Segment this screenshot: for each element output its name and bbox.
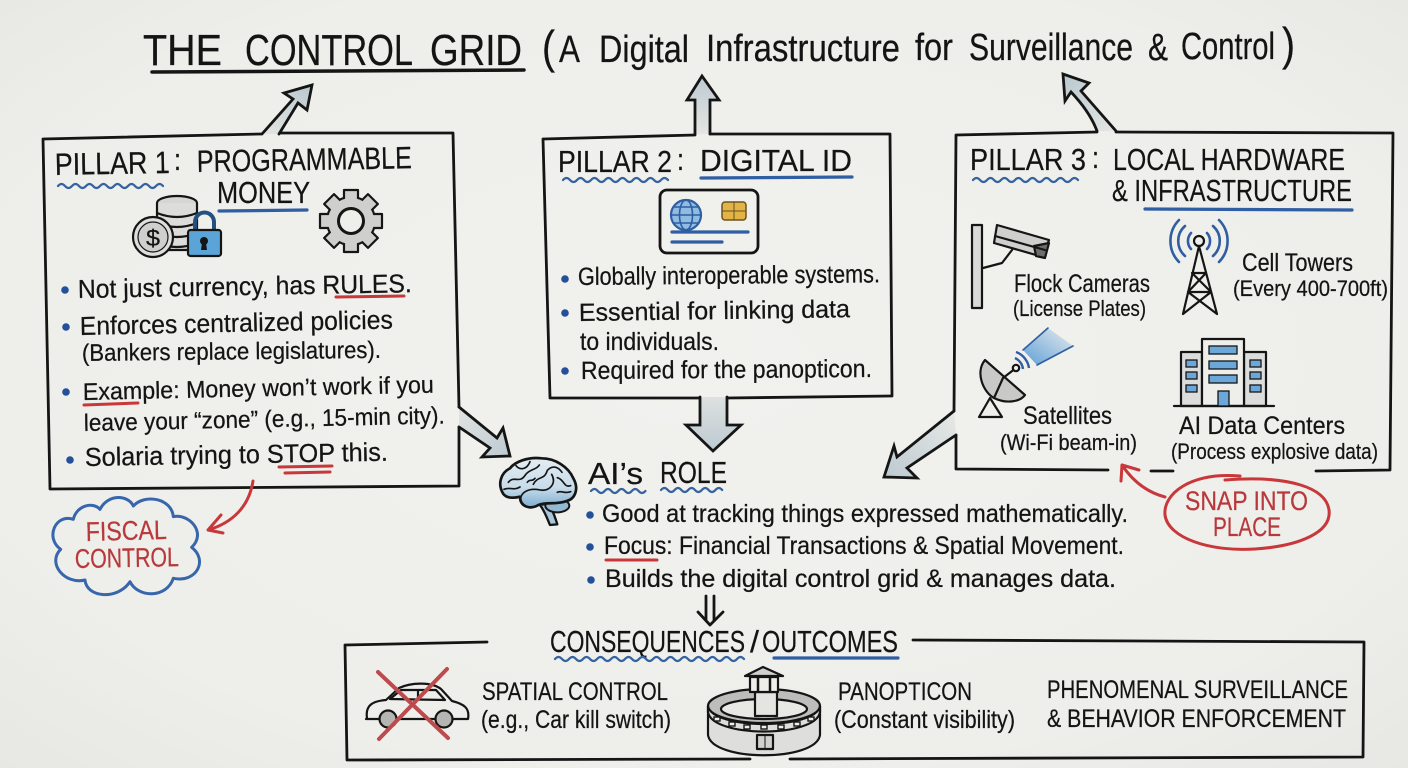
heading: pillar 1 <box>55 140 412 211</box>
heading: pillar 3: LOCAL HARDWARE <box>1113 142 1345 177</box>
icon: cell tower <box>1170 220 1228 314</box>
icon: digital id card <box>660 190 758 253</box>
panel: pillar 2 digital id <box>543 76 892 398</box>
arrow: pillar 1 to AI's role <box>459 407 510 457</box>
heading: pillar 2 <box>558 142 852 182</box>
title: Infrastructure <box>706 28 900 70</box>
text: pillar 2 bullets <box>561 260 880 385</box>
callout: fiscal control cloud: CONTROL <box>75 542 179 574</box>
heading: AI's role: ROLE <box>660 455 727 490</box>
text: pillar 1 bullets: Solaria trying to STOP this. <box>85 437 388 472</box>
icon: coins and lock: $ <box>146 225 160 251</box>
text: pillar 1 bullets: leave your “zone” (e.g., 15-min city). <box>84 402 445 437</box>
icon: flock camera <box>972 225 1049 308</box>
title: CONTROL <box>245 26 413 75</box>
text: cell towers label: Cell Towers <box>1242 249 1353 277</box>
text: flock cameras label: (License Plates) <box>1013 296 1146 321</box>
text: phenomenal surveillance and behavior enforcement: PHENOMENAL SURVEILLANCE <box>1047 676 1348 704</box>
icon: panopticon <box>708 667 820 755</box>
text: satellites label: Satellites <box>1023 402 1112 430</box>
text: pillar 1 bullets: (Bankers replace legislatures). <box>82 337 381 367</box>
text: panopticon: PANOPTICON <box>838 678 972 706</box>
heading: pillar 2: PILLAR 2 <box>558 144 672 179</box>
arrow: pillar 2 to AI's role <box>686 397 741 451</box>
title: A <box>559 29 581 71</box>
heading: pillar 3: PILLAR 3 <box>970 142 1086 177</box>
heading: pillar 2: : <box>677 142 684 177</box>
text: pillar 1 bullets: Enforces centralized policies <box>79 304 393 341</box>
heading: pillar 3: : <box>1092 140 1099 175</box>
arrow: pillar 2 to title <box>687 76 719 134</box>
title: for <box>915 27 953 69</box>
panel: pillar 1 programmable money <box>43 85 459 489</box>
heading: AI's role: AI’s <box>588 456 643 491</box>
title: ( <box>542 21 556 73</box>
heading: consequences / outcomes: OUTCOMES <box>762 624 898 659</box>
text: satellites label: (Wi-Fi beam-in) <box>1000 430 1137 455</box>
heading: pillar 2: DIGITAL ID <box>700 143 852 178</box>
text: cell towers label <box>1233 249 1388 301</box>
title: Surveillance <box>969 27 1133 69</box>
text: panopticon <box>834 678 1015 734</box>
text: cell towers label: (Every 400-700ft) <box>1233 276 1388 301</box>
text: phenomenal surveillance and behavior enforcement <box>1047 676 1348 733</box>
heading: consequences / outcomes: / <box>750 624 759 659</box>
text: ai data centers label <box>1171 412 1378 464</box>
text: pillar 1 bullets: Example: Money won’t work if you <box>83 372 434 406</box>
heading: pillar 1: PILLAR 1 <box>55 145 170 182</box>
text: AI's role bullets <box>586 500 1128 593</box>
text: spatial control <box>481 678 671 734</box>
title: THE <box>143 26 222 75</box>
callout: snap into place: SNAP INTO <box>1185 486 1308 516</box>
callout: fiscal control cloud <box>53 498 199 595</box>
heading: pillar 1: : <box>174 142 181 177</box>
text: AI's role bullets: Good at tracking things expressed mathematically. <box>602 500 1128 528</box>
icon: coins and lock <box>133 196 221 257</box>
text: satellites label <box>1000 402 1137 455</box>
heading: pillar 1: MONEY <box>217 175 310 210</box>
arrow: AI's role to consequences <box>698 596 723 625</box>
text: spatial control: (e.g., Car kill switch) <box>481 706 671 734</box>
arrow: to fiscal control <box>208 481 253 533</box>
text: ai data centers label: (Process explosive data) <box>1171 439 1378 464</box>
text: AI's role bullets: Builds the digital control grid & manages data. <box>605 565 1116 593</box>
text: pillar 2 bullets: Essential for linking data <box>579 295 850 327</box>
text: pillar 2 bullets: Required for the panopticon. <box>581 355 872 385</box>
text: flock cameras label <box>1013 270 1150 321</box>
text: spatial control: SPATIAL CONTROL <box>482 678 668 706</box>
title: & <box>1148 27 1168 69</box>
title: Control <box>1181 26 1275 68</box>
title: Digital <box>599 29 689 71</box>
arrow: pillar 1 to title <box>262 85 312 134</box>
icon: satellite dish <box>979 328 1073 417</box>
heading: AI's role <box>588 455 727 493</box>
text: AI's role bullets: Focus: Financial Transactions & Spatial Movement. <box>604 532 1124 560</box>
heading: pillar 1: PROGRAMMABLE <box>197 140 412 179</box>
text: pillar 2 bullets: Globally interoperable systems. <box>578 260 880 291</box>
text: phenomenal surveillance and behavior enforcement: & BEHAVIOR ENFORCEMENT <box>1047 705 1346 733</box>
arrow: pillar 3 to AI's role <box>884 411 956 478</box>
title <box>143 18 1295 75</box>
panel: consequences and outcomes <box>345 624 1364 760</box>
panel: pillar 3 local hardware and infrastructure <box>954 74 1393 471</box>
text: pillar 2 bullets: to individuals. <box>580 328 719 356</box>
text: panopticon: (Constant visibility) <box>834 706 1015 734</box>
callout: fiscal control cloud: FISCAL <box>85 515 167 547</box>
icon: gear <box>320 190 382 252</box>
text: pillar 1 bullets <box>61 268 445 473</box>
icon: car with red x <box>366 669 468 739</box>
heading: consequences / outcomes: CONSEQUENCES <box>550 624 745 659</box>
text: pillar 1 bullets: Not just currency, has RULES. <box>78 268 412 304</box>
text: ai data centers label: AI Data Centers <box>1179 412 1345 440</box>
icon: brain <box>500 458 576 525</box>
title: ) <box>1282 18 1295 70</box>
title: GRID <box>430 26 522 75</box>
heading: pillar 3 <box>970 140 1352 210</box>
icon: ai data center <box>1174 339 1274 406</box>
callout: snap into place <box>1165 476 1329 549</box>
panel: AI's role <box>500 455 1128 593</box>
arrow: snap into place to pillar 3 <box>1121 465 1165 497</box>
text: flock cameras label: Flock Cameras <box>1014 270 1150 298</box>
arrow: pillar 3 to title <box>1063 74 1116 131</box>
callout: snap into place: PLACE <box>1213 512 1281 542</box>
